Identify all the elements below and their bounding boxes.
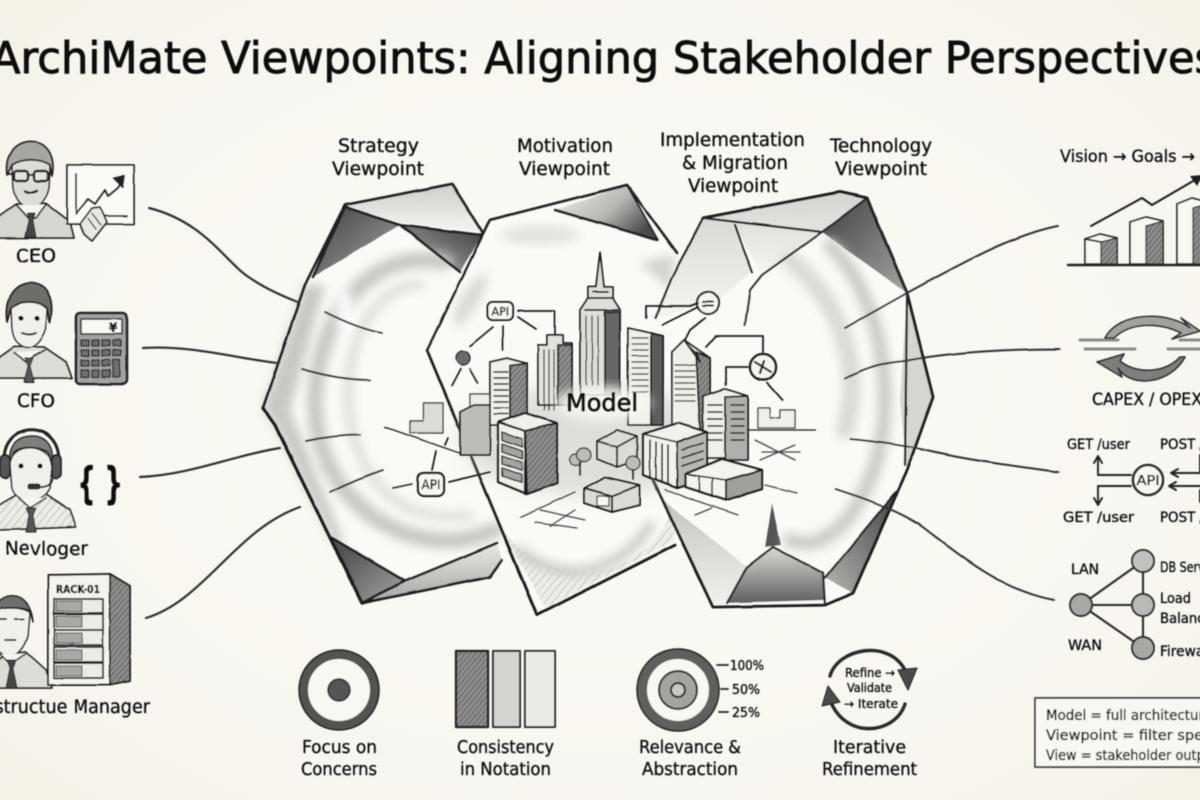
heading: technology: Viewpoint: [835, 158, 927, 180]
stakeholder column: [0, 142, 150, 718]
principle: relevance and abstraction: 100%: [730, 658, 764, 674]
output: network topology: [1068, 550, 1200, 660]
haze behind model label: [460, 385, 720, 495]
heading: strategy: Viewpoint: [332, 158, 424, 180]
label halo: [555, 386, 651, 420]
principle: relevance and abstraction: Abstraction: [642, 759, 738, 780]
heading: technology: Technology: [829, 135, 932, 157]
heading: motivation: Viewpoint: [519, 158, 610, 180]
model city illustration: [385, 252, 815, 528]
connector lines: stakeholders to viewpoints: [140, 208, 300, 618]
output: API endpoints: API: [1136, 474, 1160, 489]
right output column: [1035, 147, 1200, 767]
viewpoint headings: [332, 129, 932, 197]
building: small cube and trees: [570, 430, 640, 479]
output: API endpoints: GET /user: [1067, 437, 1130, 453]
label: Nevloger: Nevloger: [5, 538, 88, 560]
icon nodes: integration and exchange: [646, 292, 782, 400]
output: API endpoints: GET /user: [1063, 510, 1134, 526]
heading: implementation and migration: Implementation: [660, 129, 805, 151]
building: front right blocks: [643, 423, 762, 500]
principle: iterative refinement: [822, 650, 917, 780]
API node and flows lower: API: [422, 478, 440, 492]
principle: relevance and abstraction: Relevance &: [639, 737, 741, 758]
building: mid tower with cap: [538, 335, 572, 410]
output: network topology: WAN: [1068, 638, 1102, 654]
icon: growth chart board: [67, 165, 134, 241]
icon: server rack RACK-01: RACK-01: [56, 583, 100, 596]
stakeholder: CEO with chart: [0, 142, 134, 267]
output: API endpoints: [1063, 437, 1200, 526]
building: right towers: [628, 328, 748, 460]
label: CEO: CEO: [16, 246, 56, 267]
principles row: [299, 649, 917, 780]
stakeholder: developer with braces: [0, 430, 123, 560]
principle: relevance and abstraction: [637, 649, 764, 780]
principle: focus on concerns: [299, 650, 379, 780]
building: server block: [498, 413, 557, 494]
principle: iterative refinement: Validate: [847, 681, 892, 695]
output: vision to goals bar chart: Vision → Goals →: [1060, 147, 1195, 166]
heading: strategy: Strategy: [338, 135, 419, 157]
output: vision to goals bar chart: [1060, 147, 1200, 265]
heading: motivation: Motivation: [517, 135, 613, 157]
principle: iterative refinement: Iterative: [833, 737, 906, 758]
principle: focus on concerns: Focus on: [302, 737, 377, 758]
principle: relevance and abstraction: 50%: [732, 682, 760, 698]
building: low block: [584, 477, 640, 512]
lens: strategy viewpoint: [263, 184, 505, 603]
label: Model: Model: [566, 389, 638, 417]
heading: implementation and migration: & Migration: [682, 152, 788, 174]
heading: implementation and migration: Viewpoint: [688, 175, 778, 197]
street lines: [520, 440, 800, 528]
stakeholder: infrastructure manager with rack: [0, 574, 150, 718]
principle: consistency in notation: [456, 651, 555, 780]
principle: consistency in notation: in Notation: [460, 759, 551, 780]
model: three overlapping viewpoint lenses: [263, 184, 1060, 615]
icon: server rack RACK-01: [48, 574, 130, 685]
principle: consistency in notation: Consistency: [457, 737, 554, 758]
building: left tower: [460, 358, 527, 455]
output: network topology: Load: [1160, 591, 1191, 607]
output: CAPEX / OPEX cycle: [1080, 316, 1200, 409]
principle: iterative refinement: → Iterate: [844, 697, 898, 711]
lens: implementation and technology viewpoint: [642, 192, 1060, 607]
stakeholder: CFO with calculator: [0, 283, 127, 412]
icon: calculator: ¥: [109, 321, 118, 335]
principle: iterative refinement: Refine →: [845, 666, 895, 680]
principle: iterative refinement: Refinement: [822, 759, 917, 780]
callout: definitions box: [1035, 698, 1200, 767]
principle: relevance and abstraction: 25%: [732, 705, 760, 721]
label: CFO: CFO: [17, 391, 55, 412]
API node and flows upper: API: [491, 304, 509, 318]
background skylines: [385, 394, 815, 455]
building: central skyscraper with spire: [580, 252, 620, 395]
output: network topology: LAN: [1071, 562, 1099, 578]
API node and flows lower: [418, 438, 490, 496]
principle: focus on concerns: Concerns: [301, 759, 377, 780]
lens: motivation viewpoint: [427, 185, 690, 615]
API node and flows upper: [452, 302, 555, 386]
icon: code braces: { }: [77, 458, 123, 509]
